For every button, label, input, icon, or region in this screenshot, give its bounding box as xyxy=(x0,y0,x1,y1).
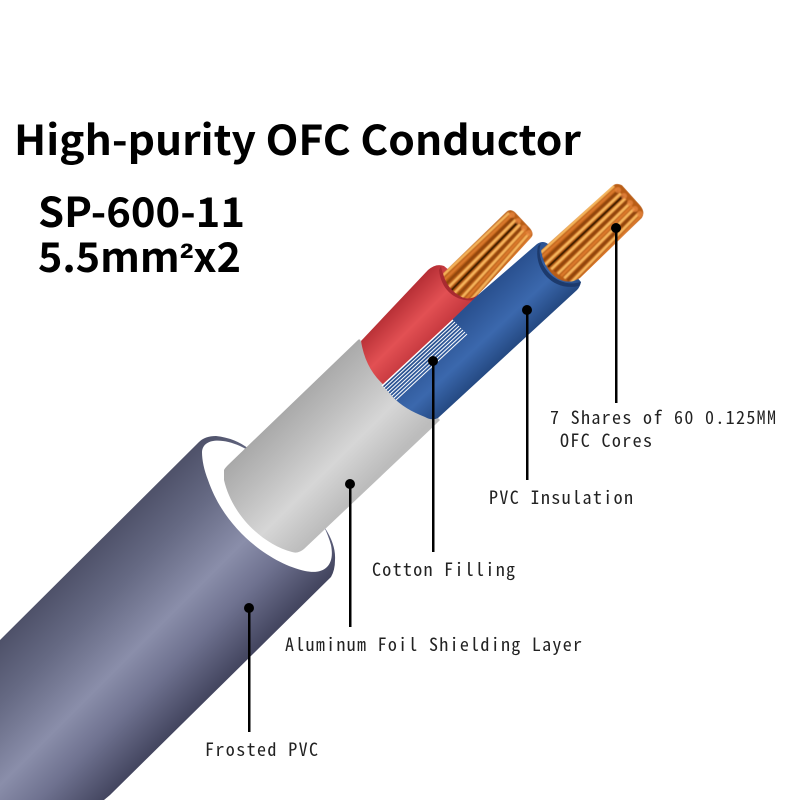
callout: OFC cores xyxy=(550,223,776,453)
callout: PVC insulation xyxy=(489,305,633,510)
outer jacket: frosted PVC xyxy=(0,436,335,800)
red wire end rim xyxy=(439,266,479,300)
callout: cotton filling xyxy=(372,356,515,582)
cable illustration xyxy=(0,184,644,800)
blue wire end rim xyxy=(537,243,581,287)
cotton filling stripes xyxy=(382,320,467,400)
callout: aluminum foil xyxy=(285,479,582,657)
red insulation xyxy=(361,265,480,386)
callout: cotton filling: Cotton Filling xyxy=(372,556,515,582)
callout: OFC cores: 7 Shares of 60 0.125MM xyxy=(550,404,776,430)
callout: frosted PVC: Frosted PVC xyxy=(205,736,318,762)
copper core: blue wire xyxy=(535,184,644,285)
blue insulation xyxy=(383,242,581,419)
model heading: SP-600-11 xyxy=(38,179,245,239)
title: High-purity OFC Conductor xyxy=(14,107,581,167)
callout: PVC insulation: PVC Insulation xyxy=(489,484,633,510)
callout: frosted PVC xyxy=(205,603,318,762)
callout: OFC cores: OFC Cores xyxy=(560,427,652,453)
aluminum foil layer xyxy=(224,339,440,553)
size heading: 5.5mm²x2 xyxy=(38,224,241,284)
callout: aluminum foil: Aluminum Foil Shielding Layer xyxy=(285,631,582,657)
copper core: red wire xyxy=(443,210,533,298)
